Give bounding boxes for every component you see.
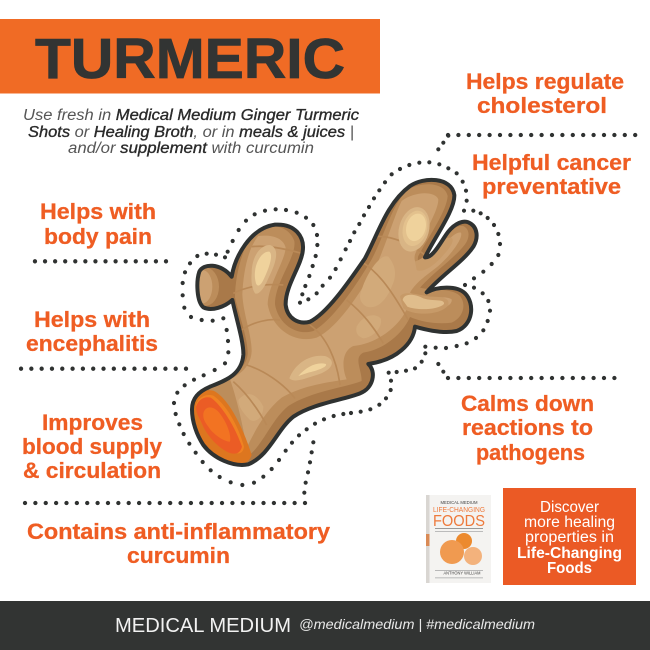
- subtitle text: Shots or Healing Broth , or in meals & juices |: [28, 124, 354, 141]
- subtitle text: and/or supplement with curcumin: [68, 140, 314, 157]
- label: helpful cancer preventative: Helpful cancer: [472, 150, 631, 175]
- root segment lines: [233, 236, 425, 425]
- label: improves blood supply and circulation: blood supply: [22, 434, 162, 459]
- illustration: turmeric root: [174, 136, 500, 493]
- footer bar: @medicalmedium | #medicalmedium: [299, 616, 535, 632]
- label: helps with encephalitis: encephalitis: [26, 331, 158, 356]
- footer bar: MEDICAL MEDIUM: [115, 615, 291, 637]
- label: contains anti-inflammatory curcumin: [27, 519, 331, 568]
- subtitle text: [23, 107, 359, 157]
- label: improves blood supply and circulation: Improves: [42, 410, 143, 435]
- label: helps regulate cholesterol: Helps regulate: [466, 69, 624, 94]
- label: helps with encephalitis: [26, 307, 158, 356]
- label: helpful cancer preventative: [472, 150, 631, 199]
- footer bar: [0, 601, 650, 650]
- title banner: [0, 19, 380, 94]
- label: helps with body pain: body pain: [44, 224, 152, 249]
- book cover: LIFE-CHANGING: [433, 505, 485, 514]
- label: improves blood supply and circulation: & circulation: [23, 458, 161, 483]
- label: helps with body pain: Helps with: [40, 199, 156, 224]
- label: contains anti-inflammatory curcumin: Contains anti-inflammatory: [27, 519, 331, 544]
- subtitle text: Use fresh in Medical Medium Ginger Turmeric: [23, 107, 359, 124]
- small knob shading: [203, 268, 219, 306]
- label: improves blood supply and circulation: [22, 410, 162, 483]
- root shaded layers: [194, 182, 475, 463]
- root outline: [192, 180, 477, 465]
- callout box: discover more: Foods: [547, 560, 592, 577]
- label: calms down reactions to pathogens: Calms down: [461, 391, 594, 416]
- label: helpful cancer preventative: preventative: [482, 174, 621, 199]
- dotted outline around root: [174, 136, 500, 493]
- dotted connector lines: [20, 135, 636, 503]
- soft inner patches: [360, 256, 395, 307]
- label: contains anti-inflammatory curcumin: curcumin: [127, 543, 230, 568]
- book cover: ANTHONY WILLIAM: [444, 570, 481, 576]
- book cover: FOODS: [433, 513, 485, 530]
- knob highlight: [251, 245, 276, 294]
- label: calms down reactions to pathogens: reactions to: [462, 415, 593, 440]
- callout box: discover more: properties in: [525, 529, 614, 546]
- book cover: MEDICAL MEDIUM: [440, 500, 478, 505]
- label: helps with body pain: [40, 199, 156, 249]
- label: helps regulate cholesterol: cholesterol: [477, 93, 607, 118]
- book cover: [426, 495, 491, 583]
- label: calms down reactions to pathogens: pathogens: [476, 440, 585, 465]
- label: helps regulate cholesterol: [466, 69, 624, 118]
- callout box: discover more: more healing: [524, 514, 615, 531]
- trunk highlight: [289, 356, 332, 380]
- callout box: discover more: Discover: [540, 499, 599, 516]
- callout box: discover more: [503, 488, 636, 585]
- finger highlight: [398, 207, 430, 252]
- label: calms down reactions to pathogens: [461, 391, 594, 465]
- callout box: discover more: Life-Changing: [517, 545, 622, 562]
- cut end: [190, 390, 252, 464]
- title banner: TURMERIC: [35, 27, 345, 91]
- label: helps with encephalitis: Helps with: [34, 307, 150, 332]
